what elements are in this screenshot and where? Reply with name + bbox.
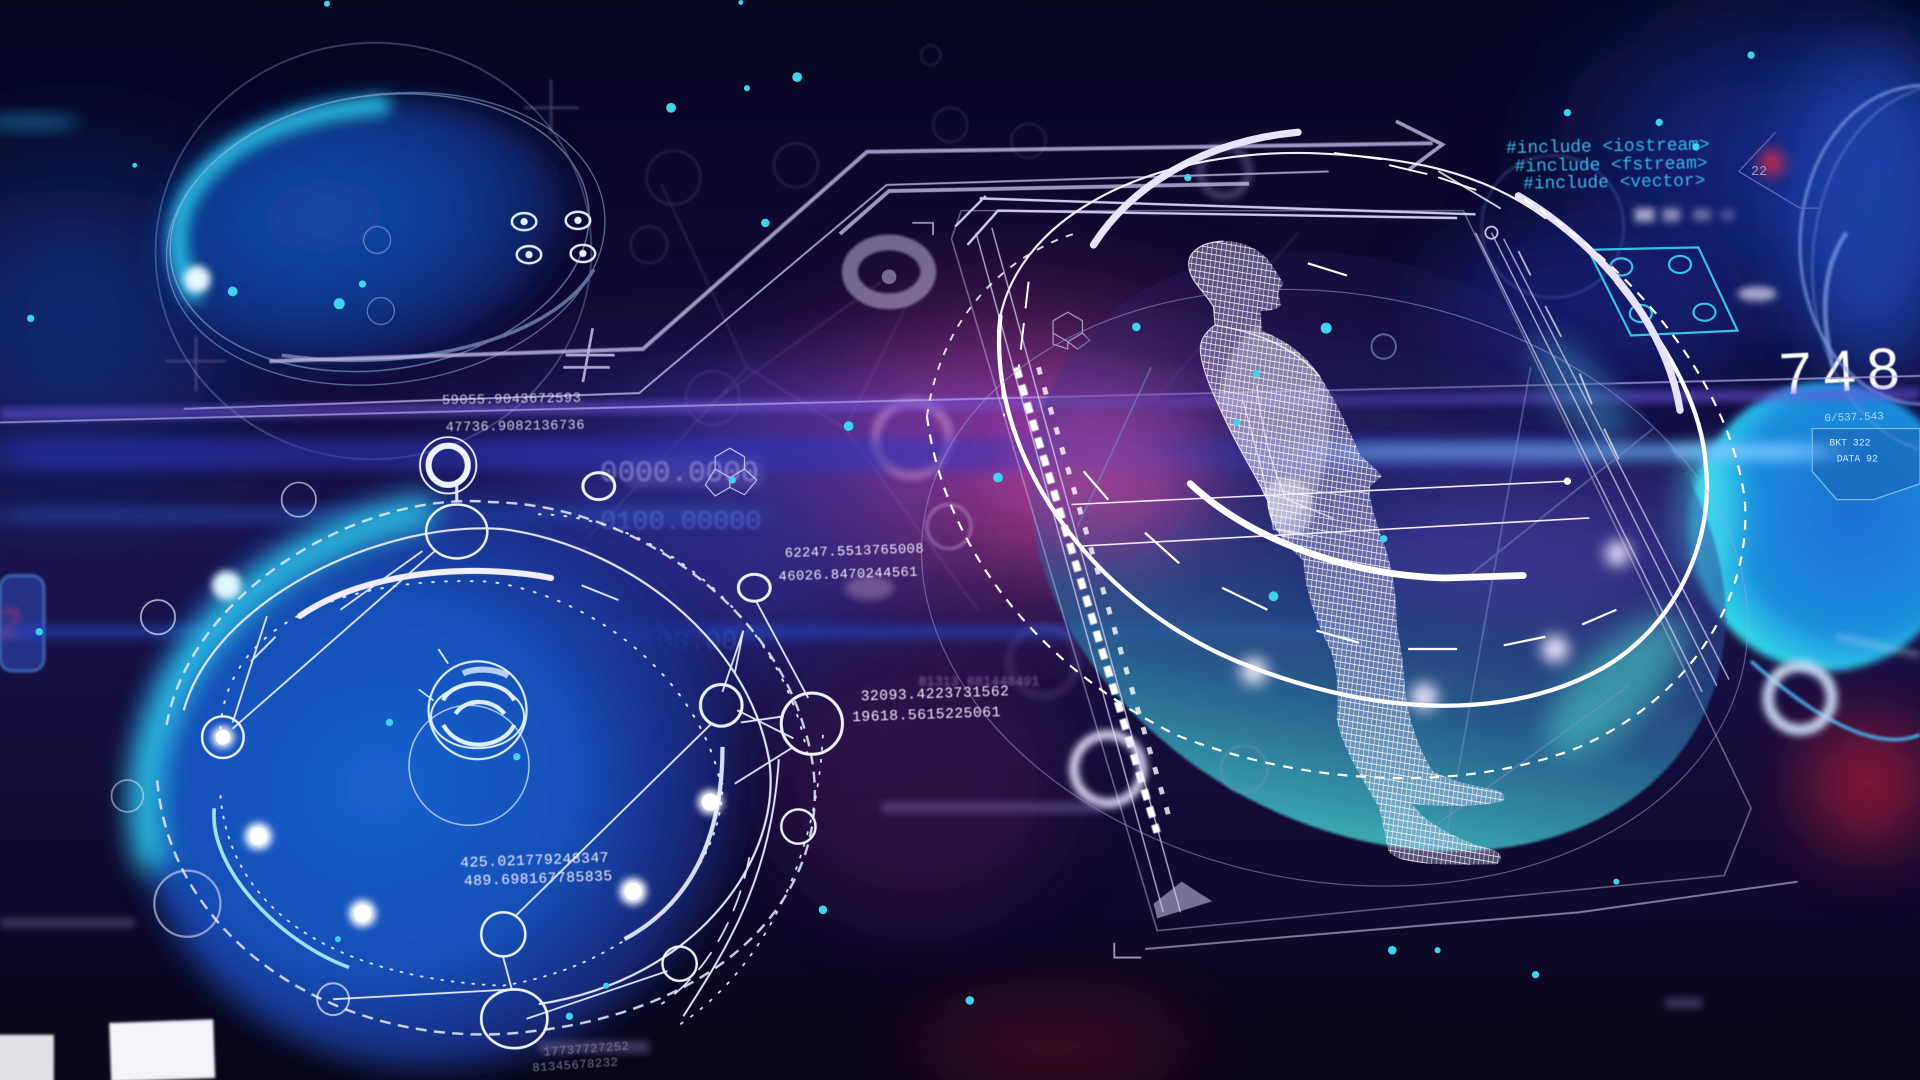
code snippet: #include <iostream> [1506,136,1710,159]
numeric readouts: 19618.5615225061 [852,705,1001,726]
blurred data strips [0,802,1702,1053]
numeric readouts: 62247.5513765008 [785,542,924,562]
right edge cyan sphere: BKT 322 [1829,438,1871,449]
blurred data readouts: 81313 881448491 [918,676,1039,691]
blurred status blocks [1635,208,1777,301]
code snippet [1506,136,1710,195]
numeric readouts: 425.021779248347 [460,851,609,872]
numeric readouts: 47736.9082136736 [446,419,585,436]
blurred data readouts: 0100.00 [624,628,738,658]
code snippet: #include <fstream> [1514,154,1708,177]
numeric readouts: 17737727252 [543,1040,630,1060]
right edge cyan sphere: DATA 92 [1837,454,1878,465]
blurred data readouts: 0000.0000 [600,457,759,490]
scan lines with marker [1071,478,1589,546]
human chamber panel frame [951,196,1798,949]
glowing white nodes [212,726,722,927]
blurred background network and HUD rings [588,45,1624,696]
numeric readouts: 32093.4223731562 [860,684,1010,705]
chamber orbit arcs [998,132,1707,706]
dashed orbit of chamber [874,196,1796,949]
wireframe human figure [1188,240,1504,865]
right edge cyan sphere [1676,335,1920,740]
numeric readouts: 46026.8470244561 [778,566,918,585]
orbital rings of left sphere [157,485,823,1034]
crosshair marks [165,80,615,392]
numeric readouts: 59055.9043672593 [442,392,582,409]
blurred inner nodes of bowl [1074,334,1653,845]
top left lens sphere [142,28,624,474]
bottom left large sphere [82,442,799,1080]
horizontal light flares [0,376,1920,637]
numeric readouts: 81345678232 [532,1055,619,1075]
molecule icons [705,312,1090,496]
right edge cyan sphere: 748 [1778,335,1912,407]
red marker with number [1739,132,1818,208]
bottom left white blocks [0,1019,215,1080]
red marker with number: 22 [1751,165,1767,180]
central ring icon of left sphere [409,649,529,825]
top right blurred sphere outline [1800,86,1920,453]
numeric readouts [442,392,1010,1075]
code snippet: #include <vector> [1523,171,1706,195]
teal bowl sphere [924,133,1831,969]
cyan HUD panel with rings [1588,247,1738,336]
blurred data readouts [600,457,1039,691]
numeric readouts: 489.698167785835 [464,869,613,890]
node circles on left sphere [111,437,842,1048]
circuit lines with arrow [184,121,1442,958]
blurred data readouts: 0100.00000 [600,508,762,538]
right edge cyan sphere: 0/537.543 [1824,411,1884,425]
